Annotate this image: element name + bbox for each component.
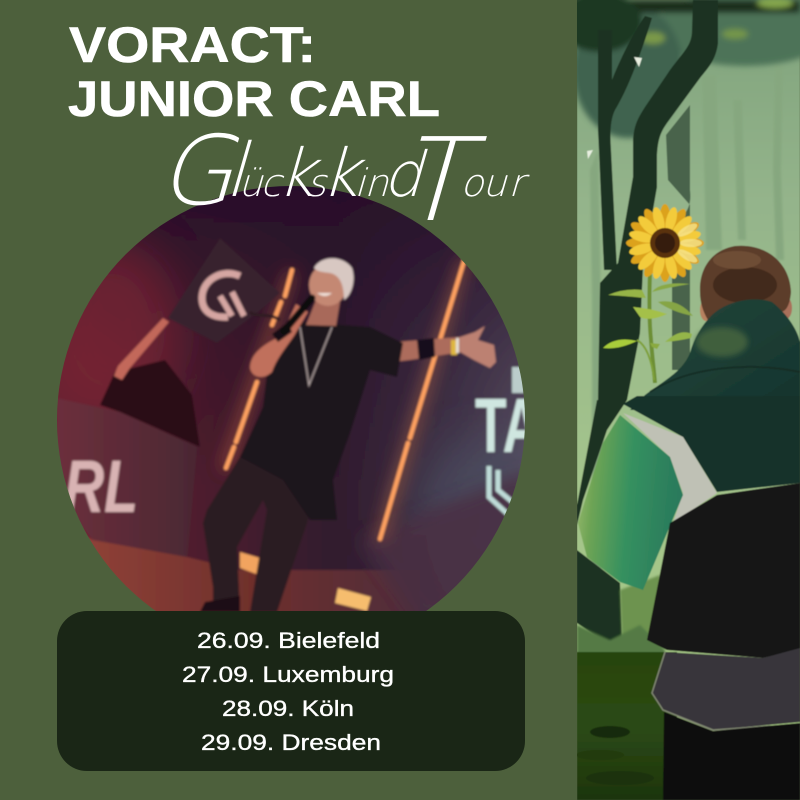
tour dates list: 28.09. Köln bbox=[222, 696, 354, 721]
script title: Glückskind Tour: G bbox=[151, 116, 257, 228]
green sleeve bbox=[578, 415, 683, 590]
flag bbox=[168, 238, 280, 343]
figure seen from behind bbox=[578, 246, 800, 800]
DJ arm holding flag bbox=[114, 318, 169, 380]
DJ desk with banner: RL bbox=[64, 445, 138, 528]
heading: Voract Junior Carl bbox=[68, 17, 440, 127]
black torso bbox=[647, 483, 800, 658]
bracelets bbox=[451, 340, 457, 355]
neck bbox=[306, 300, 340, 326]
hem edge bbox=[652, 652, 770, 730]
script title: Glückskind Tour: u bbox=[479, 162, 516, 206]
illustration: forest with sunflower and figure bbox=[558, 0, 800, 800]
outstretched arm bbox=[393, 337, 462, 362]
stage backdrop bbox=[57, 205, 525, 611]
wristband bbox=[417, 338, 435, 360]
trousers bbox=[663, 712, 800, 800]
jacket upper back bbox=[623, 396, 800, 492]
script title: Glückskind Tour: c bbox=[257, 162, 291, 206]
misty forest backdrop bbox=[577, 0, 800, 800]
grey hem bbox=[652, 648, 800, 730]
photo: Junior Carl on stage in a circular crop bbox=[40, 180, 540, 620]
LED panels bbox=[240, 552, 371, 611]
tour dates panel bbox=[57, 611, 525, 771]
lower tree and undergrowth bbox=[576, 400, 677, 800]
hair bbox=[700, 246, 791, 320]
performer bbox=[200, 258, 496, 612]
dark tree: main curved trunk bbox=[598, 0, 718, 400]
script title: Glückskind Tour: s bbox=[303, 162, 336, 206]
script title: Glückskind Tour: d bbox=[378, 138, 438, 211]
script title: Glückskind Tour: i bbox=[351, 162, 374, 206]
script title: Glückskind Tour: T bbox=[387, 113, 496, 247]
trousers bbox=[203, 457, 317, 612]
hair bbox=[314, 258, 354, 300]
stage floor bbox=[88, 537, 418, 611]
neon sign: TA bbox=[475, 383, 540, 469]
ears and neck bbox=[700, 304, 708, 322]
script title: Glückskind Tour: r bbox=[505, 162, 534, 206]
bent arm bbox=[250, 304, 308, 377]
script title: Glückskind Tour bbox=[145, 113, 547, 247]
heading: Voract Junior Carl: VORACT: bbox=[69, 17, 316, 73]
tour dates list: 26.09. Bielefeld bbox=[197, 628, 380, 653]
necklace bbox=[300, 327, 332, 385]
hand bbox=[460, 326, 496, 368]
tour dates list: 29.09. Dresden bbox=[201, 730, 381, 755]
smile bbox=[317, 293, 332, 296]
DJ silhouette bbox=[100, 360, 200, 447]
sunflower head bbox=[626, 204, 704, 282]
script title: Glückskind Tour: l bbox=[219, 127, 264, 214]
orange light tubes bbox=[225, 258, 465, 540]
t-shirt bbox=[240, 322, 403, 520]
white butterflies bbox=[587, 57, 642, 159]
sunflower stem and leaves bbox=[603, 272, 693, 383]
script title: Glückskind Tour: k bbox=[316, 134, 376, 212]
dark tree: left trunk bbox=[598, 16, 652, 270]
script title: Glückskind Tour: ü bbox=[235, 162, 272, 206]
neon sign bbox=[474, 365, 525, 516]
script title: Glückskind Tour: k bbox=[272, 134, 332, 212]
DJ desk with banner bbox=[57, 398, 197, 557]
script title: Glückskind Tour: n bbox=[361, 162, 398, 206]
midtone tree bbox=[666, 105, 690, 370]
face bbox=[309, 264, 347, 306]
background ghost trees bbox=[590, 148, 784, 568]
tour dates list: 27.09. Luxemburg bbox=[182, 662, 394, 687]
hood and jacket shoulder bbox=[630, 299, 800, 410]
canopy bbox=[558, 0, 800, 138]
microphone bbox=[284, 298, 312, 331]
script title: Glückskind Tour: o bbox=[457, 162, 493, 206]
tour dates list bbox=[182, 628, 394, 755]
white band bbox=[623, 413, 717, 523]
watch bbox=[272, 322, 292, 342]
heading: Voract Junior Carl: JUNIOR CARL bbox=[68, 71, 440, 127]
